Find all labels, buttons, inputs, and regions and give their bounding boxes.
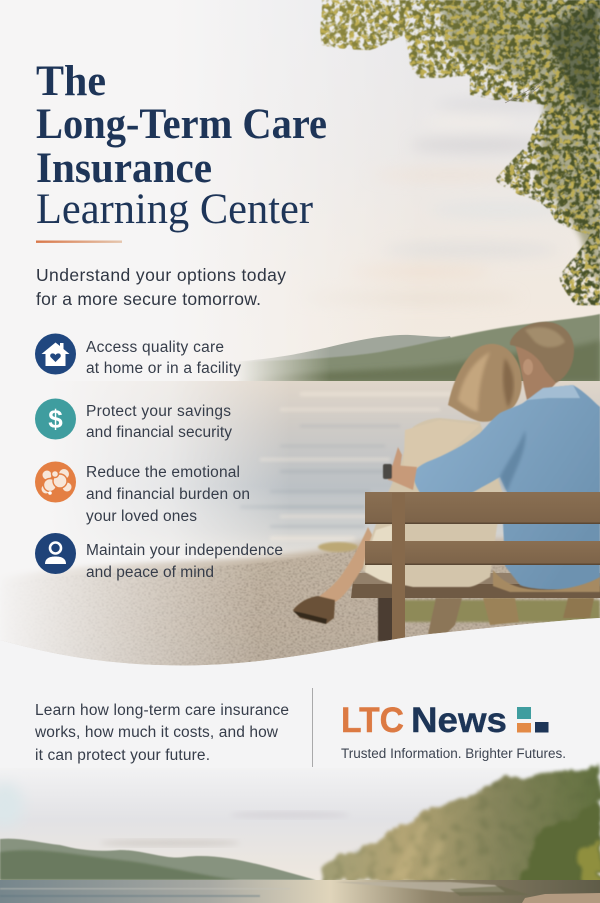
distant hills (230, 314, 600, 382)
LTC News logo (341, 701, 566, 761)
wordmark (341, 701, 507, 740)
bottom landscape photo (0, 768, 600, 903)
left hills (0, 839, 316, 880)
tree foliage (320, 0, 600, 305)
benefit text: Maintain your independence (86, 542, 283, 559)
benefit text: Protect your savings (86, 403, 231, 420)
title: Learning Center (36, 186, 313, 233)
benefit text (86, 542, 283, 581)
benefit text: at home or in a facility (86, 360, 241, 377)
benefit: independence (35, 533, 283, 581)
benefit text: and financial burden on (86, 486, 250, 503)
benefit text (86, 464, 250, 525)
lake water (110, 381, 600, 556)
right trees (322, 768, 600, 895)
bottom water (0, 880, 600, 903)
sky with clouds (262, 0, 600, 358)
subheading (36, 265, 286, 309)
icon: person (35, 533, 76, 574)
call to action text: Learn how long-term care insurance (35, 702, 289, 719)
call to action text: it can protect your future. (35, 747, 210, 764)
benefit text: your loved ones (86, 508, 197, 525)
wordmark: News (411, 701, 507, 740)
woman's leg and shoe (293, 527, 375, 624)
title: The (36, 58, 106, 105)
benefit text (86, 403, 232, 441)
call to action text (34, 702, 289, 764)
title: Long-Term Care (36, 101, 327, 148)
man's trousers (493, 570, 600, 592)
benefit text (86, 339, 241, 377)
subheading: Understand your options today (36, 265, 286, 285)
title underline (36, 240, 122, 243)
benefit text: Reduce the emotional (86, 464, 240, 481)
icon: family circles (35, 462, 76, 502)
wordmark: LTC (341, 701, 404, 740)
bottom white wave panel (0, 618, 600, 903)
divider (312, 688, 313, 767)
benefit: quality care (35, 334, 241, 377)
benefit text: and financial security (86, 424, 232, 441)
title: Insurance (36, 145, 212, 192)
icon: dollar sign: $ (48, 404, 63, 434)
bottom sky (0, 788, 600, 880)
bench seat (351, 573, 600, 598)
bench back slats and post (365, 492, 600, 640)
benefit: loved ones (35, 462, 250, 525)
benefit text: and peace of mind (86, 564, 214, 581)
photo: couple at the lake (0, 0, 600, 680)
benefit text: Access quality care (86, 339, 224, 356)
benefit: savings (35, 398, 232, 441)
man's shirt (413, 385, 600, 590)
call to action text: works, how much it costs, and how (34, 724, 279, 741)
sandy shore (0, 538, 600, 680)
tagline: Trusted Information. Brighter Futures. (341, 746, 566, 761)
title (36, 58, 327, 233)
man's head (510, 322, 574, 400)
couple and bench (293, 322, 600, 641)
woman's hair (448, 344, 522, 422)
logo squares (517, 707, 548, 732)
subheading: for a more secure tomorrow. (36, 289, 261, 309)
woman's sweater and skirt (363, 418, 505, 587)
shore rocks (522, 893, 600, 903)
rear legs under the bench (378, 595, 594, 641)
icon: dollar sign (35, 398, 76, 440)
icon: house with heart (35, 334, 76, 374)
hand and watch (383, 447, 417, 490)
